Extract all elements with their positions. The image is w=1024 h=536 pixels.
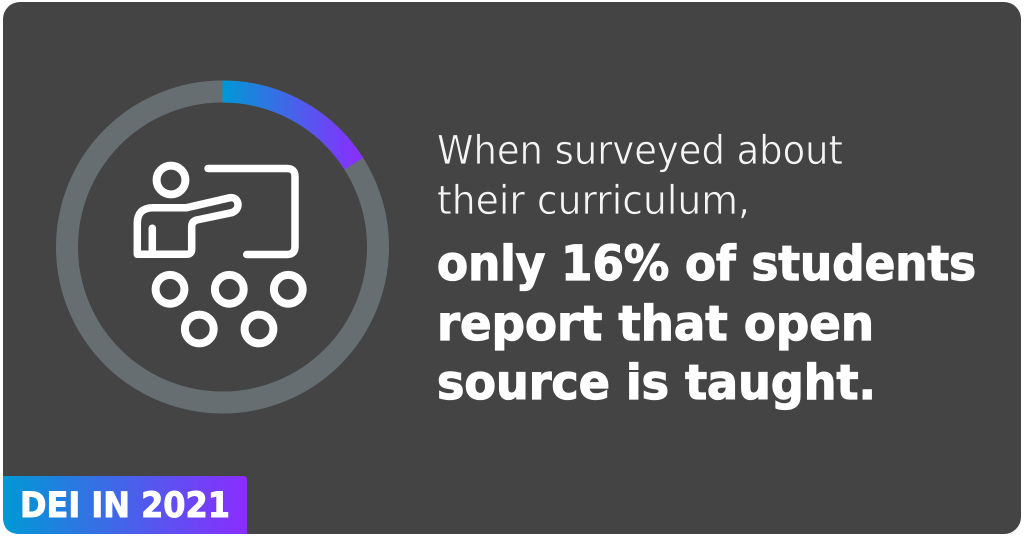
icon: teacher pointing at board with students <box>137 166 303 343</box>
text block: key statistic: source is taught. <box>437 355 876 411</box>
text block: key statistic: only 16% of students <box>437 236 976 292</box>
text block: key statistic <box>437 236 976 411</box>
donut chart: 16 percent <box>67 91 378 402</box>
badge: DEI in 2021: DEI IN 2021 <box>20 486 230 526</box>
text block: intro statement <box>437 128 843 224</box>
text block: intro statement: When surveyed about <box>437 128 843 174</box>
text block: key statistic: report that open <box>437 296 874 352</box>
badge: DEI in 2021 <box>3 476 247 534</box>
text block: intro statement: their curriculum, <box>437 178 750 224</box>
